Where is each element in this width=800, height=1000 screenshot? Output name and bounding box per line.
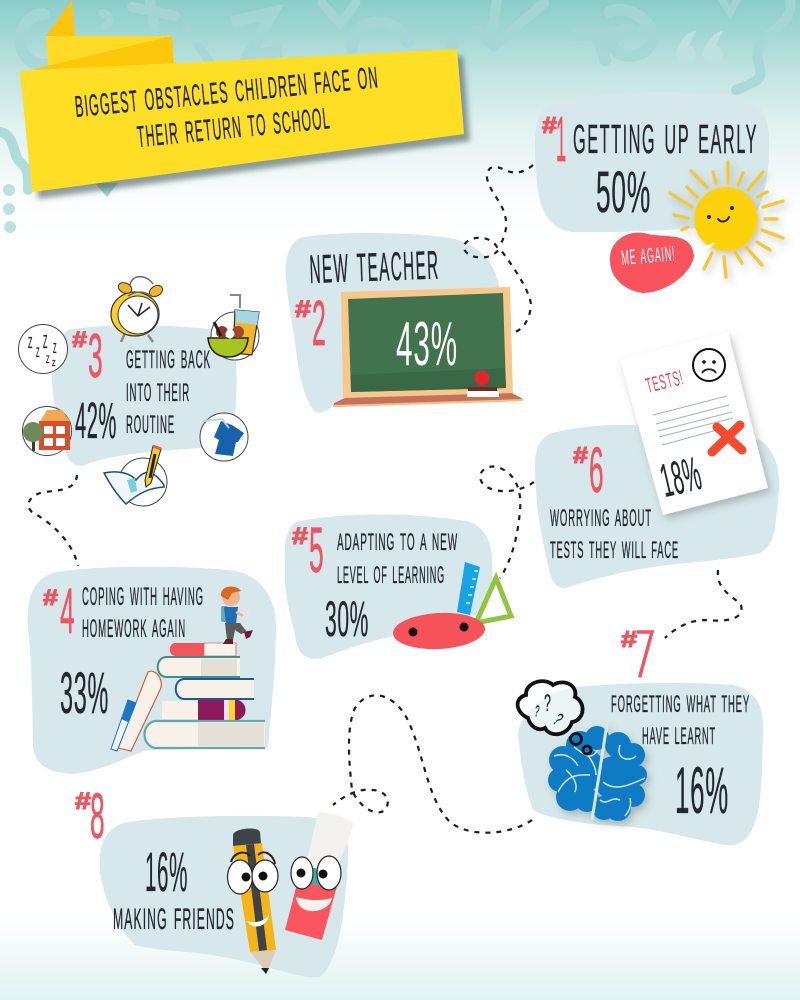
- panel 8: making friends: 8: [90, 780, 107, 852]
- test paper: 18%: [655, 446, 706, 507]
- rank 3: #: [72, 327, 87, 352]
- panel 2: new teacher: NEW TEACHER: [309, 243, 440, 292]
- panel 6: worrying about tests: [535, 332, 779, 588]
- panel 1: getting up early: 50%: [596, 160, 651, 225]
- description: [550, 505, 679, 564]
- rank 4: #: [43, 585, 58, 610]
- icon: sad face: [693, 349, 725, 381]
- test paper: [620, 332, 768, 515]
- description: [337, 529, 458, 589]
- icon: sleep zzz: [18, 324, 68, 374]
- description: [611, 691, 750, 750]
- panel 8: making friends: [75, 780, 353, 977]
- panel 5: adapting to new level: [285, 514, 511, 659]
- callout: me again: ME AGAIN!: [620, 242, 676, 270]
- icon: sleep zzz: Z: [28, 335, 33, 352]
- callout: me again: [607, 231, 716, 295]
- icon: house and tree: [22, 406, 72, 456]
- rank 2: #: [295, 296, 311, 323]
- icon: red cross: [712, 425, 742, 452]
- panel 3: getting back into routine: 42%: [75, 392, 117, 449]
- rank 2: [295, 287, 328, 359]
- banner title: [20, 0, 464, 192]
- ribbon fold: [30, 0, 174, 70]
- panel 5: adapting to new level: 30%: [325, 591, 369, 647]
- panel 5: adapting to new level: ADAPTING TO A NEW: [337, 529, 458, 556]
- panel 1: getting up early: 1: [556, 103, 568, 175]
- icon: thought cloud: ?: [549, 710, 568, 730]
- icon: pencil character: [228, 828, 278, 974]
- icon: sun: [670, 162, 783, 277]
- rank 5: [292, 514, 326, 586]
- panel 3: getting back into routine: [18, 277, 259, 506]
- panel 4: coping with homework: 33%: [60, 661, 109, 726]
- icon: shirt: [200, 413, 248, 461]
- rank 6: [573, 434, 606, 506]
- icon: ruler and triangle: [457, 562, 511, 623]
- panel 4: coping with homework: 4: [60, 575, 77, 647]
- panel 5: adapting to new level: LEVEL OF LEARNING: [337, 562, 445, 589]
- dashed path: #5 to #6: [480, 466, 534, 578]
- description: ROUTINE: [126, 411, 175, 439]
- panel 7: forgetting learnt: [518, 626, 763, 845]
- chalkboard: 43%: [396, 310, 458, 379]
- dashed path: #6 to #7: [665, 570, 742, 638]
- panel 1: getting up early: [535, 92, 783, 295]
- rank 5: #: [292, 523, 308, 550]
- rank 7: #: [621, 626, 637, 652]
- dashed path: #1 to #2: [464, 165, 533, 333]
- icon: brain: [548, 724, 647, 821]
- icon: alarm clock: [111, 277, 165, 342]
- chalkboard: [333, 287, 523, 407]
- panel 2: new teacher: 2: [312, 287, 328, 359]
- icon: sleep zzz: Z: [36, 344, 40, 360]
- title text: [73, 61, 384, 160]
- banner shape: [20, 49, 464, 192]
- background quote marks: [3, 31, 723, 233]
- icon: thought cloud: ?: [544, 690, 552, 717]
- panel 3: getting back into routine: 3: [88, 322, 105, 391]
- title text: THEIR RETURN TO SCHOOL: [136, 102, 332, 154]
- panel 4: coping with homework: [28, 567, 276, 774]
- icon: eraser character: [285, 812, 353, 940]
- icon: thought cloud: [518, 681, 591, 754]
- panel 4: coping with homework: COPING WITH HAVING: [82, 583, 204, 611]
- test paper: TESTS!: [644, 366, 686, 398]
- icon: sleep zzz: Z: [53, 340, 57, 357]
- icon: stack of books: [111, 643, 265, 751]
- description: [126, 346, 211, 439]
- icon: thought cloud: ?: [533, 703, 541, 721]
- icon: boy reading: [221, 587, 253, 644]
- description: INTO THEIR: [126, 379, 190, 407]
- panel 8: making friends: MAKING FRIENDS: [113, 903, 235, 936]
- icon: book and pencil: [104, 446, 167, 506]
- panel 4: coping with homework: HOMEWORK AGAIN: [82, 615, 186, 643]
- rank 7: [621, 626, 652, 676]
- background doodles: [0, 0, 790, 190]
- description: WORRYING ABOUT: [550, 505, 652, 532]
- panel 6: worrying about tests: 6: [589, 434, 606, 506]
- rank 1: [542, 103, 568, 175]
- panel 2: new teacher: [286, 233, 523, 413]
- icon: sleep zzz: Z: [52, 359, 56, 368]
- panel 3: getting back into routine: GETTING BACK: [126, 346, 211, 374]
- icon: breakfast: [208, 295, 259, 360]
- dashed path: #3 to #4: [28, 475, 78, 566]
- rank 1: #: [542, 112, 557, 138]
- banner title: BIGGEST OBSTACLES CHILDREN FACE ON: [73, 61, 380, 124]
- rank 8: #: [75, 788, 91, 815]
- dashed path: #7 to #8: [333, 695, 532, 833]
- icon: apple and book: [467, 370, 499, 397]
- icon: red eraser: [392, 611, 486, 651]
- rank 4: [43, 575, 77, 647]
- icon: sleep zzz: Z: [43, 332, 48, 352]
- panel 5: adapting to new level: 5: [309, 514, 326, 586]
- rank 8: [75, 780, 107, 852]
- icon: sleep zzz: Z: [46, 354, 50, 366]
- panel 8: making friends: 16%: [145, 840, 188, 903]
- rank 3: [72, 322, 105, 391]
- description: [82, 583, 204, 643]
- rank 6: #: [573, 442, 588, 468]
